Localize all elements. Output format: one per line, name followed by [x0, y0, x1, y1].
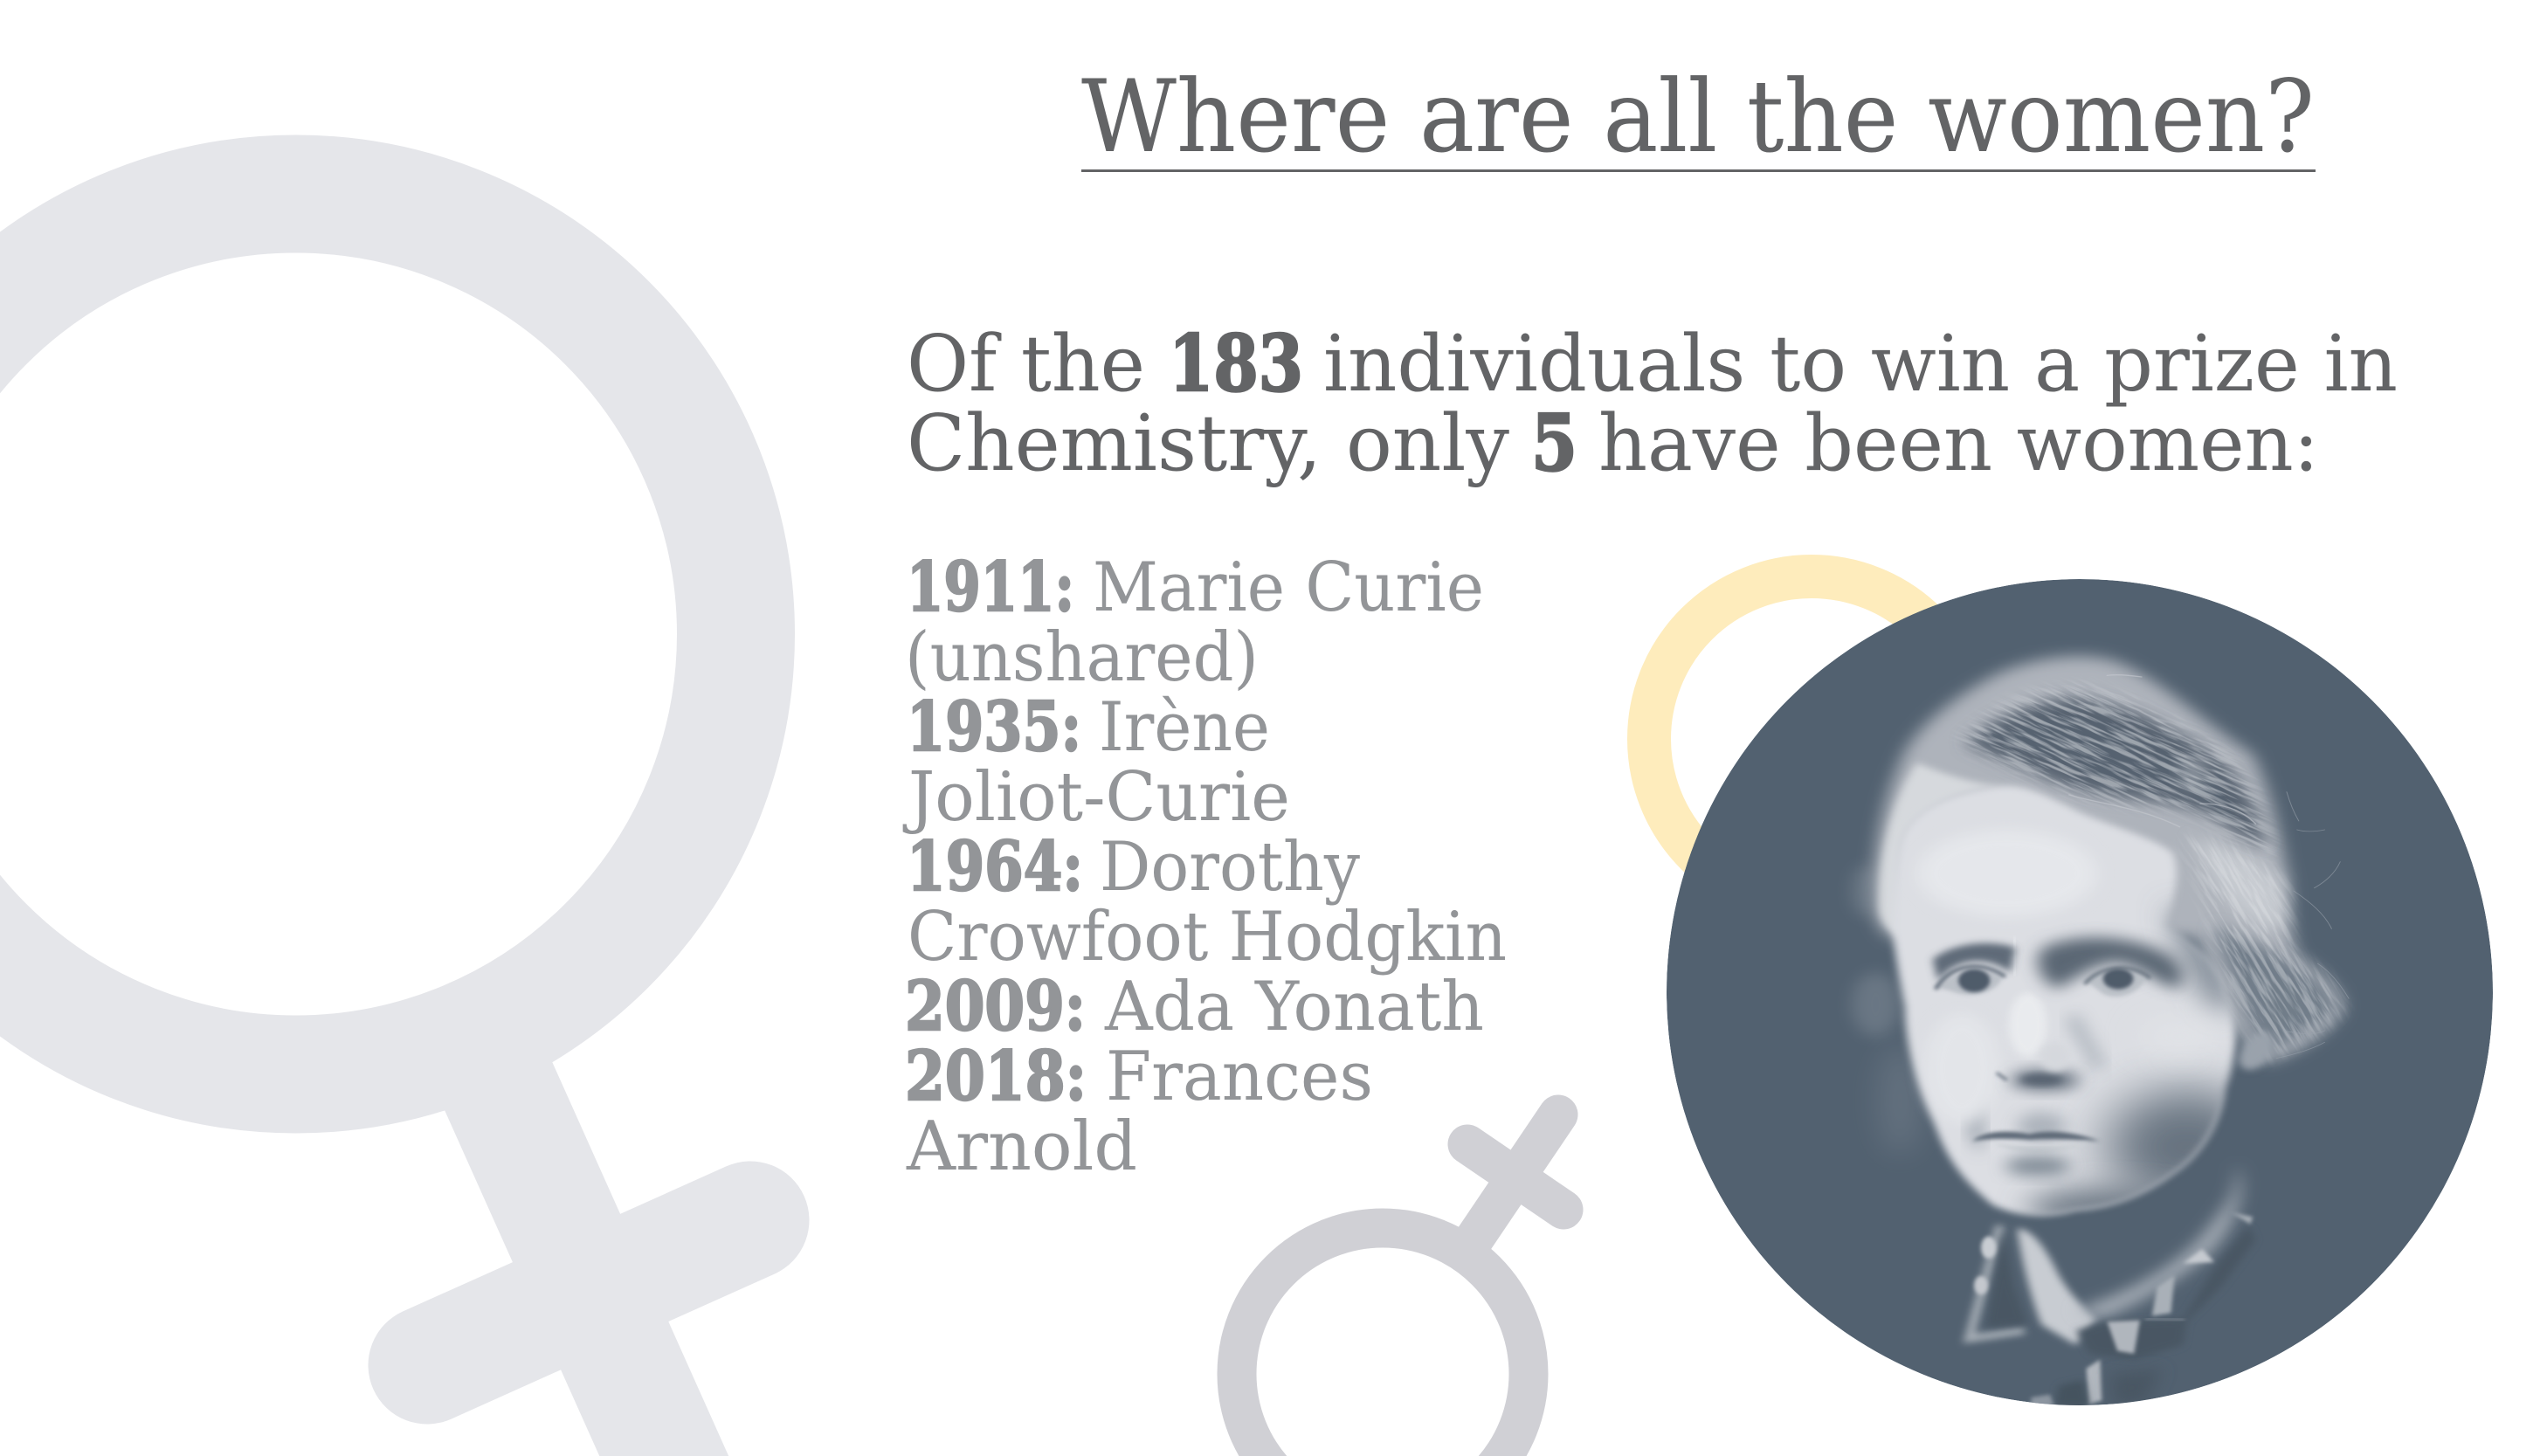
portrait mouth: [1972, 1132, 2100, 1176]
title underline: [1081, 169, 2316, 172]
entry: 1935 Irène Joliot-Curie: 1935:: [907, 687, 1081, 767]
entry: 1911 Marie Curie: (unshared): [905, 618, 1259, 697]
entry: 1964 Dorothy Crowfoot Hodgkin: Dorothy: [1100, 828, 1360, 907]
portrait right hair texture: [2189, 839, 2346, 1055]
portrait neck: [2018, 1164, 2240, 1345]
portrait nose: [1997, 1042, 2080, 1090]
portrait hair lower right: [2214, 926, 2336, 1057]
portrait hair curl highlight: [2181, 756, 2205, 788]
portrait hair mass: [1874, 656, 2343, 1063]
portrait left eye: [1933, 943, 2016, 995]
intro paragraph: 183: [1169, 317, 1303, 409]
portrait face shading: [1960, 899, 2231, 1216]
entry: 1964 Dorothy Crowfoot Hodgkin: [907, 827, 1507, 976]
entry: 1935 Irène Joliot-Curie: Irène: [1099, 688, 1270, 767]
entry: 2018 Frances Arnold: [905, 1037, 1373, 1186]
entry: 2018 Frances Arnold: 2018:: [905, 1037, 1087, 1116]
entry: 1911 Marie Curie: Marie Curie: [1093, 549, 1484, 627]
entry: 1964 Dorothy Crowfoot Hodgkin: Crowfoot Hodgkin: [908, 898, 1507, 976]
intro paragraph: have been women:: [1598, 397, 2319, 488]
portrait light hair on left: [1879, 763, 2000, 937]
intro paragraph: Of the: [907, 318, 1145, 409]
entry: 1935 Irène Joliot-Curie: [902, 687, 1290, 837]
portrait ear: [2239, 1031, 2274, 1070]
entry: 2009 Ada Yonath: Ada Yonath: [1104, 968, 1484, 1046]
intro paragraph: 5: [1531, 397, 1577, 488]
icon: small female symbol: [1237, 1114, 1563, 1456]
icon: yellow ring: [1649, 576, 1974, 901]
intro paragraph: individuals to win a prize in: [1323, 318, 2398, 409]
entry: 2018 Frances Arnold: Arnold: [906, 1108, 1137, 1186]
list of women laureates: [902, 548, 1507, 1186]
portrait: Marie Curie: [1667, 579, 2493, 1405]
portrait wisps on left: [1852, 865, 1921, 1156]
entry: 1935 Irène Joliot-Curie: Joliot-Curie: [902, 758, 1290, 837]
portrait hair bright lock: [2193, 838, 2283, 932]
entry: 1911 Marie Curie: 1911:: [907, 548, 1074, 627]
title: Where are all the women?: [1081, 59, 2315, 175]
icon: large female symbol: [0, 194, 750, 1456]
portrait dark swept hair: [1965, 699, 2266, 847]
portrait right eye: [2038, 937, 2182, 997]
portrait hair strands: [2069, 675, 2349, 1059]
entry: 2009 Ada Yonath: [905, 967, 1484, 1046]
portrait hair texture: [1960, 684, 2275, 854]
portrait face: [1893, 786, 2266, 1229]
entry: 2009 Ada Yonath: 2009:: [905, 967, 1086, 1046]
entry: 1911 Marie Curie: [905, 548, 1484, 697]
entry: 1964 Dorothy Crowfoot Hodgkin: 1964:: [907, 827, 1083, 907]
entry: 2018 Frances Arnold: Frances: [1106, 1038, 1373, 1116]
intro paragraph: Chemistry, only: [907, 397, 1510, 488]
portrait collar: [1969, 1212, 2255, 1406]
intro paragraph: [907, 317, 2398, 488]
